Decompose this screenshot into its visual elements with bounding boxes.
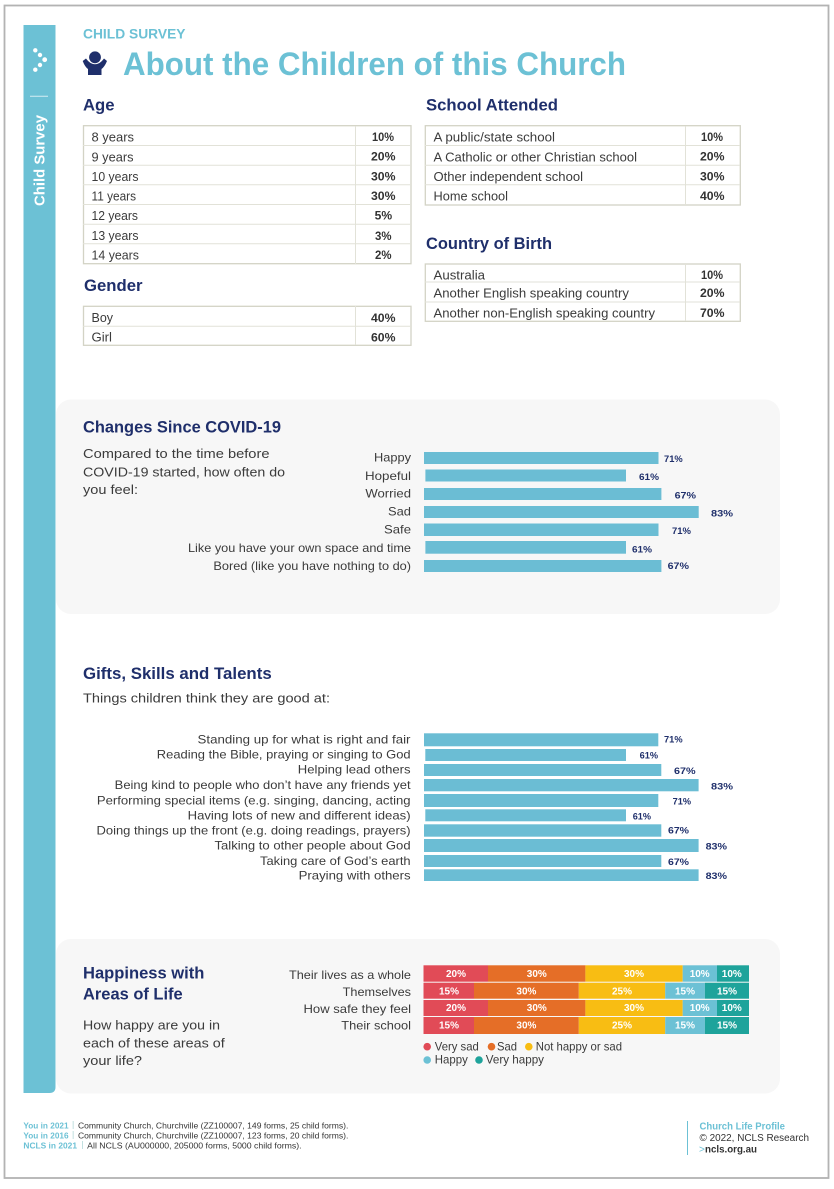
table: age: 30% bbox=[371, 172, 396, 184]
footer: sources bbox=[23, 1121, 348, 1151]
stacked bar chart: 30% bbox=[516, 1020, 537, 1032]
bar chart: covid feelings: 67% bbox=[675, 491, 697, 502]
legend bbox=[423, 1039, 622, 1067]
question text: covid: Compared to the time before bbox=[83, 447, 270, 461]
bar chart: things children are good at: 67% bbox=[668, 825, 690, 836]
table: gender: 40% bbox=[371, 313, 396, 325]
bar chart: covid feelings: Like you have your own space and time bbox=[188, 541, 411, 555]
table: age: 12 years bbox=[92, 209, 138, 223]
question text: covid bbox=[83, 447, 285, 497]
bar chart: things children are good at: 61% bbox=[633, 811, 652, 822]
bar chart: covid feelings: 61% bbox=[632, 545, 653, 556]
table: school attended: 20% bbox=[700, 152, 724, 164]
bar chart: things children are good at: Standing up for what is right and fair bbox=[198, 732, 410, 746]
legend: Very happy bbox=[486, 1053, 544, 1067]
footer: publisher block: > bbox=[699, 1145, 705, 1156]
bar chart: covid feelings bbox=[188, 451, 734, 573]
bar chart: things children are good at: 67% bbox=[674, 766, 696, 777]
row labels: Their school bbox=[341, 1019, 411, 1033]
heading: happiness: Happiness with bbox=[83, 965, 204, 983]
row labels: Their lives as a whole bbox=[289, 968, 411, 982]
stacked bar chart: 30% bbox=[516, 986, 537, 998]
table: school attended: Home school bbox=[434, 190, 508, 204]
stacked bar chart: 15% bbox=[439, 1020, 459, 1032]
bar chart: covid feelings: Safe bbox=[384, 522, 411, 536]
sidebar bbox=[24, 25, 56, 1093]
table: country of birth: Another non-English speaking country bbox=[434, 306, 656, 320]
sidebar label: Child Survey bbox=[32, 114, 48, 206]
heading: country of birth: Country of Birth bbox=[426, 235, 552, 253]
stacked bar chart: 30% bbox=[624, 969, 644, 980]
table: age: 30% bbox=[371, 191, 396, 203]
heading: gender: Gender bbox=[84, 277, 143, 295]
stacked bar chart: 15% bbox=[439, 986, 459, 998]
table: school attended bbox=[425, 126, 740, 205]
stacked bar chart: 20% bbox=[446, 969, 466, 980]
bar chart: things children are good at: 61% bbox=[640, 751, 659, 762]
table: age: 13 years bbox=[92, 229, 138, 243]
bar chart: things children are good at: 83% bbox=[711, 781, 734, 792]
title: About the Children of this Church bbox=[123, 46, 626, 82]
heading: covid: Changes Since COVID-19 bbox=[83, 418, 281, 436]
heading: gifts: Gifts, Skills and Talents bbox=[83, 665, 272, 683]
heading: happiness: Areas of Life bbox=[83, 985, 183, 1003]
panel: age bbox=[83, 96, 411, 264]
table: age: 14 years bbox=[92, 248, 139, 262]
stacked bar chart: 10% bbox=[722, 969, 742, 980]
table: school attended: Other independent school bbox=[434, 170, 583, 184]
bar chart: covid feelings: 83% bbox=[711, 509, 734, 520]
heading: happiness bbox=[83, 965, 204, 1003]
question text: happiness: How happy are you in bbox=[83, 1019, 220, 1033]
table: school attended: 30% bbox=[700, 172, 724, 184]
legend: Happy bbox=[435, 1053, 468, 1067]
footer: publisher block bbox=[687, 1121, 809, 1156]
bar chart: things children are good at: Taking care of God’s earth bbox=[260, 854, 411, 868]
bar chart: covid feelings: 61% bbox=[639, 472, 660, 483]
table: age: 5% bbox=[375, 210, 392, 222]
bar chart: things children are good at: Talking to other people about God bbox=[214, 839, 411, 853]
stacked bar chart: 30% bbox=[527, 969, 547, 980]
table: country of birth bbox=[425, 264, 740, 321]
footer: sources: NCLS in 2021 bbox=[23, 1142, 78, 1151]
table: age: 10 years bbox=[92, 170, 138, 184]
stacked bar chart: 20% bbox=[446, 1003, 466, 1014]
bar chart: things children are good at: 71% bbox=[664, 735, 683, 746]
bar chart: things children are good at: Helping lead others bbox=[298, 763, 411, 777]
footer: sources: All NCLS (AU000000, 205000 forms, 5000 child forms). bbox=[87, 1142, 302, 1151]
panel: school attended bbox=[425, 96, 740, 205]
table: gender: Girl bbox=[92, 330, 112, 344]
question text: happiness: each of these areas of bbox=[83, 1037, 225, 1051]
question text: happiness: your life? bbox=[83, 1054, 142, 1068]
bar chart: things children are good at: 71% bbox=[673, 796, 692, 807]
eyebrow heading: CHILD SURVEY bbox=[83, 26, 186, 41]
table: age: 3% bbox=[375, 231, 392, 243]
footer: publisher block: ncls.org.au bbox=[705, 1145, 757, 1156]
stacked bar chart: 10% bbox=[690, 1003, 710, 1014]
row labels: Themselves bbox=[343, 985, 411, 999]
table: school attended: 10% bbox=[701, 132, 723, 144]
bar chart: covid feelings: Sad bbox=[388, 504, 411, 518]
bar chart: things children are good at bbox=[96, 732, 734, 882]
question text: covid: COVID-19 started, how often do bbox=[83, 466, 285, 480]
bar chart: covid feelings: Worried bbox=[365, 486, 411, 500]
table: gender: Boy bbox=[92, 311, 114, 325]
panel: gender bbox=[83, 277, 411, 345]
table: country of birth: 20% bbox=[700, 288, 724, 300]
table: school attended: A public/state school bbox=[434, 130, 555, 144]
panel: gifts, skills and talents bbox=[83, 665, 734, 882]
panel: country of birth bbox=[425, 235, 740, 321]
table: country of birth: 70% bbox=[700, 308, 724, 320]
table: country of birth: 10% bbox=[701, 270, 723, 282]
table: gender bbox=[83, 306, 411, 345]
bar chart: covid feelings: 71% bbox=[664, 454, 683, 465]
stacked bar chart: 25% bbox=[612, 1020, 632, 1032]
bar chart: covid feelings: Happy bbox=[374, 451, 411, 465]
bar chart: things children are good at: Reading the Bible, praying or singing to God bbox=[157, 747, 411, 761]
table: school attended: 40% bbox=[700, 191, 724, 203]
footer: sources: You in 2016 bbox=[23, 1132, 69, 1141]
stacked bar chart: 15% bbox=[717, 1020, 737, 1032]
stacked bar chart: 10% bbox=[690, 969, 710, 980]
bar chart: things children are good at: Praying with others bbox=[299, 868, 411, 882]
table: country of birth: Another English speaking country bbox=[434, 286, 630, 300]
footer: sources: You in 2021 bbox=[23, 1121, 69, 1130]
panel: changes since covid-19 bbox=[56, 400, 780, 614]
panel: happiness with areas of life bbox=[56, 939, 780, 1094]
stacked bar chart: 10% bbox=[722, 1003, 742, 1014]
stacked bar chart: 15% bbox=[717, 986, 737, 998]
question text: covid: you feel: bbox=[83, 483, 138, 497]
bar chart: covid feelings: 71% bbox=[672, 526, 692, 537]
footer: sources: Community Church, Churchville (ZZ100007, 149 forms, 25 child forms). bbox=[78, 1121, 348, 1130]
question text: happiness bbox=[83, 1019, 225, 1068]
heading: school attended: School Attended bbox=[426, 96, 558, 114]
footer: sources: Community Church, Churchville (ZZ100007, 123 forms, 20 child forms). bbox=[78, 1132, 348, 1141]
icon: logo dots bbox=[33, 48, 47, 72]
table: age: 11 years bbox=[92, 190, 136, 204]
intro text: gifts: Things children think they are good at: bbox=[83, 692, 330, 706]
legend: Sad bbox=[497, 1039, 517, 1053]
table: school attended: A Catholic or other Christian school bbox=[434, 150, 637, 164]
stacked bar chart: 15% bbox=[675, 1020, 695, 1032]
legend: Not happy or sad bbox=[536, 1039, 622, 1053]
bar chart: things children are good at: 83% bbox=[706, 841, 728, 852]
bar chart: things children are good at: 83% bbox=[706, 871, 728, 882]
bar chart: things children are good at: Performing special items (e.g. singing, dancing, acting bbox=[97, 794, 411, 808]
table: age: 2% bbox=[375, 250, 392, 262]
icon: child with raised arms bbox=[83, 51, 107, 75]
row labels bbox=[289, 968, 411, 1033]
bar chart: covid feelings: Hopeful bbox=[365, 469, 411, 483]
table: gender: 60% bbox=[371, 332, 396, 344]
footer: publisher block: © 2022, NCLS Research bbox=[700, 1133, 809, 1144]
stacked bar chart: 15% bbox=[675, 986, 695, 998]
stacked bar chart: 30% bbox=[624, 1003, 644, 1014]
bar chart: covid feelings: Bored (like you have nothing to do) bbox=[213, 559, 411, 573]
bar chart: things children are good at: 67% bbox=[668, 857, 690, 868]
row labels: How safe they feel bbox=[304, 1002, 411, 1016]
table: country of birth: Australia bbox=[434, 268, 485, 282]
bar chart: covid feelings: 67% bbox=[668, 561, 690, 572]
bar chart: things children are good at: Having lots of new and different ideas) bbox=[188, 808, 411, 822]
footer: publisher block: Church Life Profile bbox=[700, 1121, 785, 1132]
table: age: 20% bbox=[371, 152, 396, 164]
bar chart: things children are good at: Doing things up the front (e.g. doing readings, prayers) bbox=[96, 823, 411, 837]
table: age: 9 years bbox=[92, 150, 134, 164]
table: age: 10% bbox=[372, 132, 394, 144]
table: age: 8 years bbox=[92, 130, 134, 144]
stacked bar chart bbox=[424, 965, 749, 1034]
stacked bar chart: 30% bbox=[527, 1003, 547, 1014]
stacked bar chart: 25% bbox=[612, 986, 632, 998]
heading: age: Age bbox=[83, 96, 114, 114]
bar chart: things children are good at: Being kind to people who don’t have any friends yet bbox=[115, 778, 411, 792]
table: age bbox=[83, 126, 411, 264]
legend: Very sad bbox=[435, 1039, 479, 1053]
